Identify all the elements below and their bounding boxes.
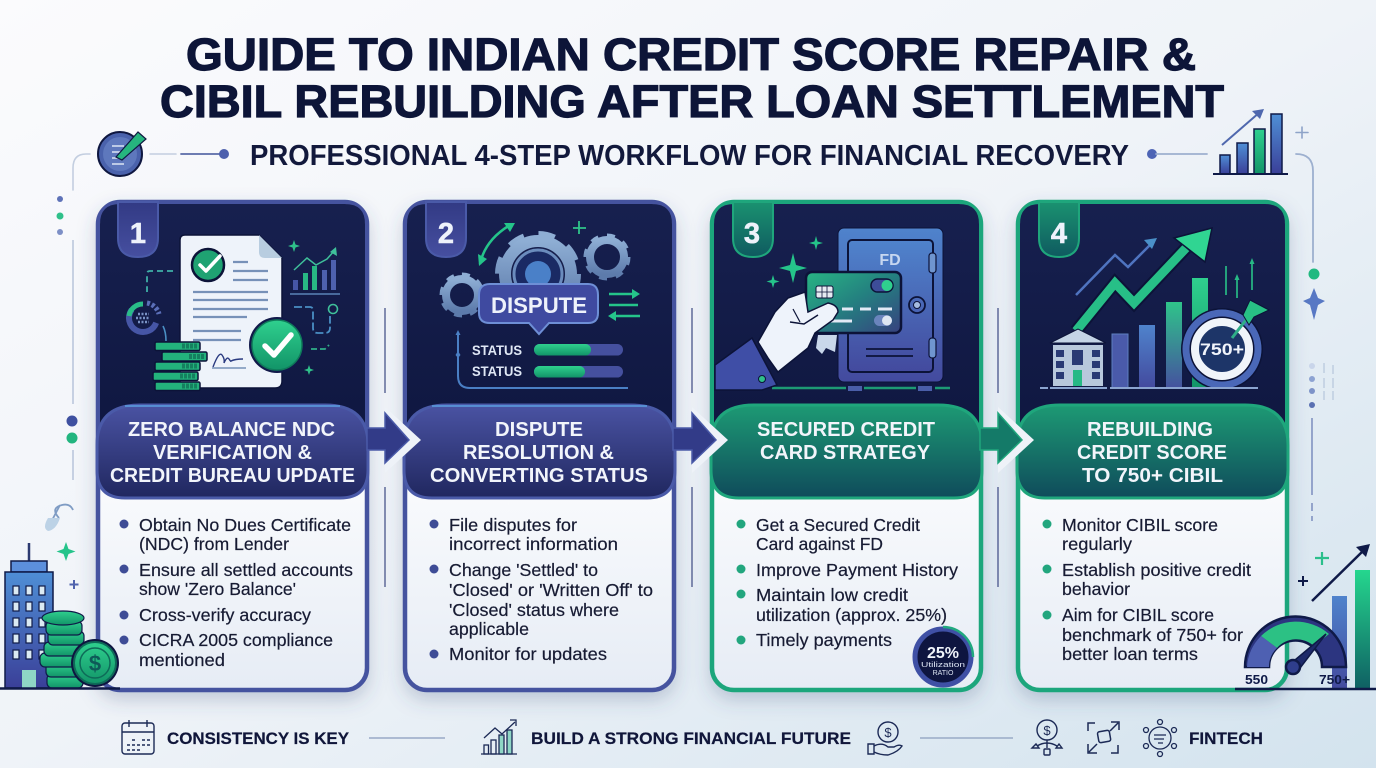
bullet list: better loan terms — [1062, 644, 1198, 664]
bullet list: File disputes for — [449, 515, 577, 535]
bullet list — [736, 515, 958, 650]
icon: dollar network: $ — [1043, 723, 1051, 738]
bullet list: Card against FD — [756, 534, 883, 554]
bullet list: 'Closed' status where — [449, 600, 619, 620]
icon: rising bar chart — [1213, 109, 1288, 174]
heading band — [1017, 405, 1288, 498]
card shell — [1018, 202, 1287, 690]
illustration: dispute gears and status bars: STATUS — [472, 342, 522, 358]
heading band — [404, 405, 675, 498]
step number 3: 3 — [744, 218, 760, 250]
heading band: CONVERTING STATUS — [430, 464, 648, 487]
gutter lines — [385, 308, 998, 587]
bullet list: Establish positive credit — [1062, 560, 1251, 580]
arrow: step 2 to 3 — [673, 407, 728, 473]
bullet list: Maintain low credit — [756, 585, 908, 605]
bullet list: Get a Secured Credit — [756, 515, 920, 535]
utilization badge: Utilization — [921, 662, 965, 669]
divider — [920, 737, 1013, 739]
utilization badge — [915, 627, 973, 685]
heading band: REBUILDING — [1087, 418, 1213, 441]
bullet list: Improve Payment History — [756, 560, 958, 580]
illustration: verified document — [125, 235, 340, 390]
step number 4: 4 — [1051, 218, 1067, 250]
illustration: rising score with target: 750+ — [1200, 340, 1244, 359]
bullet list: Change 'Settled' to — [449, 560, 598, 580]
heading band: RESOLUTION & — [463, 441, 614, 464]
subtitle: PROFESSIONAL 4-STEP WORKFLOW FOR FINANCIAL RECOVERY — [250, 140, 1129, 172]
bullet list: applicable — [449, 619, 529, 639]
bullet list: incorrect information — [449, 534, 618, 554]
arrow: step 3 to 4 — [980, 407, 1034, 473]
panel: step 2 — [404, 202, 675, 690]
illustration: secured card and FD safe — [715, 228, 950, 391]
step number 1: 1 — [130, 218, 146, 250]
title: GUIDE TO INDIAN CREDIT SCORE REPAIR & — [186, 29, 1196, 80]
bullet list — [120, 515, 353, 670]
heading band: DISPUTE — [495, 418, 583, 441]
header left connector — [73, 149, 229, 190]
step number 3 — [733, 202, 773, 257]
icon: dollar on hand: $ — [884, 725, 892, 740]
heading band: VERIFICATION & — [153, 441, 312, 464]
footer: build a strong financial future — [481, 720, 851, 754]
heading band — [97, 405, 368, 498]
bullet list: CICRA 2005 compliance — [139, 630, 333, 650]
bullet list: benchmark of 750+ for — [1062, 625, 1243, 645]
bullet list: Monitor CIBIL score — [1062, 515, 1218, 535]
heading band: CARD STRATEGY — [760, 441, 930, 464]
bullet list — [1042, 515, 1251, 664]
card shell — [405, 202, 674, 690]
bullet list: Cross-verify accuracy — [139, 605, 311, 625]
card shell — [98, 202, 367, 690]
heading band: SECURED CREDIT — [757, 418, 935, 441]
icon: dollar on hand — [868, 722, 902, 755]
bullet list: 'Closed' or 'Written Off' to — [449, 580, 653, 600]
step number 2: 2 — [438, 218, 454, 250]
footer: build a strong financial future: BUILD A STRONG FINANCIAL FUTURE — [531, 729, 851, 748]
illustration: city building and coin stack — [0, 505, 120, 688]
illustration: dispute gears and status bars: DISPUTE — [491, 293, 587, 318]
bullet list — [430, 515, 653, 664]
illustration: score gauge with growth bars — [1235, 544, 1376, 689]
heading band: TO 750+ CIBIL — [1082, 464, 1223, 487]
arrow: step 1 to 2 — [367, 407, 421, 473]
illustration: score gauge with growth bars: 550 — [1245, 673, 1268, 687]
illustration: score gauge with growth bars: 750+ — [1319, 673, 1350, 687]
utilization badge: RATIO — [933, 670, 954, 677]
bullet list: utilization (approx. 25%) — [756, 605, 947, 625]
panel: step 3 — [711, 202, 982, 690]
header right connector — [1147, 127, 1313, 262]
bullet list: behavior — [1062, 579, 1130, 599]
panel: step 4 — [1017, 202, 1288, 690]
step number 4 — [1039, 202, 1079, 257]
title — [160, 29, 1224, 127]
bullet list: Timely payments — [756, 630, 892, 650]
illustration: rising score with target — [1040, 228, 1269, 390]
card shell — [712, 202, 981, 690]
step number 2 — [426, 202, 466, 257]
icon: document and pen — [98, 132, 146, 176]
footer: consistency is key — [122, 720, 350, 754]
bullet list: regularly — [1062, 534, 1132, 554]
left side decorations — [56, 196, 78, 480]
bullet list: Aim for CIBIL score — [1062, 605, 1214, 625]
heading band — [711, 405, 982, 498]
heading band: ZERO BALANCE NDC — [128, 418, 335, 441]
illustration: city building and coin stack: $ — [89, 651, 101, 676]
step number 1 — [118, 202, 158, 257]
bullet list: (NDC) from Lender — [139, 534, 289, 554]
divider — [369, 737, 445, 739]
illustration: dispute gears and status bars — [444, 221, 640, 388]
title: CIBIL REBUILDING AFTER LOAN SETTLEMENT — [160, 76, 1224, 127]
bullet list: mentioned — [139, 650, 225, 670]
icon: expand arrows — [1088, 722, 1119, 753]
illustration: dispute gears and status bars: STATUS — [472, 363, 522, 379]
utilization badge: 25% — [927, 645, 959, 662]
right side decorations — [1303, 268, 1333, 521]
icon: dollar network — [1032, 720, 1062, 755]
heading band: CREDIT BUREAU UPDATE — [110, 464, 355, 487]
bullet list: Ensure all settled accounts — [139, 560, 353, 580]
footer: fintech — [1144, 720, 1263, 756]
illustration: secured card and FD safe: FD — [879, 252, 901, 269]
panel: step 1 — [97, 202, 368, 690]
bullet list: show 'Zero Balance' — [139, 579, 296, 599]
bullet list: Monitor for updates — [449, 644, 607, 664]
bullet list: Obtain No Dues Certificate — [139, 515, 351, 535]
heading band: CREDIT SCORE — [1077, 441, 1227, 464]
footer: consistency is key: CONSISTENCY IS KEY — [167, 729, 350, 748]
footer: fintech: FINTECH — [1189, 729, 1263, 748]
